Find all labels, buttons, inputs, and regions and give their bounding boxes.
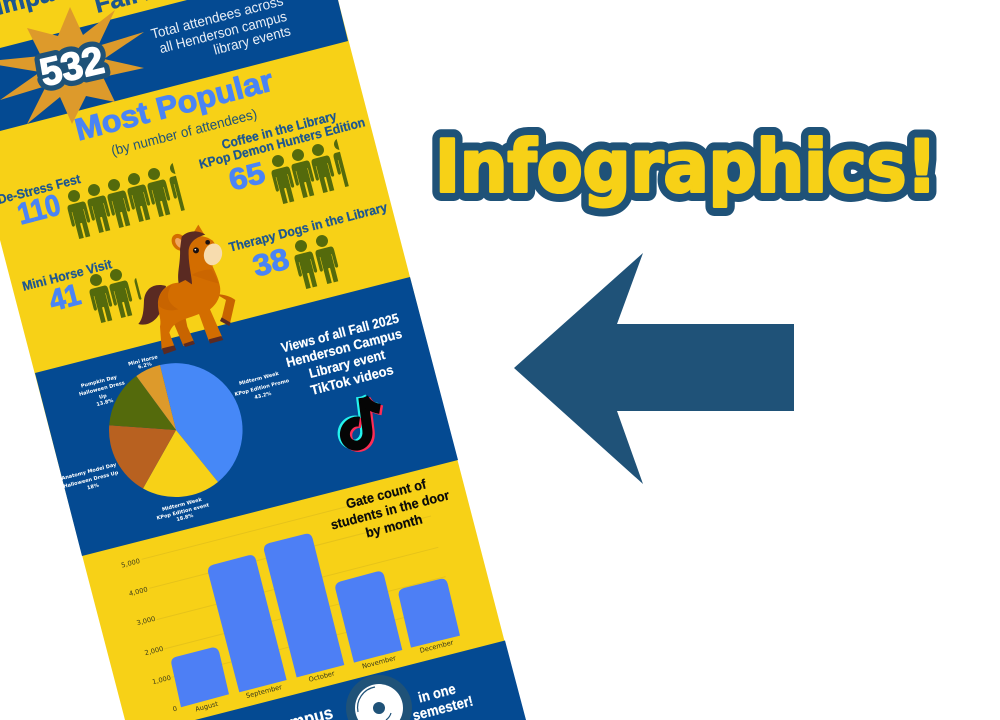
pie labels: 43.2% — [254, 391, 272, 401]
panel: middle blue band — [35, 277, 458, 556]
poster heading, cropped — [0, 0, 201, 21]
pie labels: Midterm Week — [161, 497, 203, 513]
stat: Coffee in the Library 65: KPop Demon Hunters Edition — [197, 114, 367, 172]
text: in one semester: in one — [417, 681, 457, 707]
text: TikTok views title: Library event — [307, 347, 387, 381]
bar chart: gate count by month: 3,000 — [136, 615, 156, 627]
text: gate count title: Gate count of — [344, 476, 428, 512]
stat: Therapy Dogs in the Library 38: 38 — [249, 243, 293, 283]
bar chart: gate count by month: December — [419, 638, 455, 655]
subheading: by number of attendees: (by number of attendees) — [109, 105, 259, 159]
pie labels: Halloween Dress Up — [63, 470, 119, 490]
pie labels: Mini Horse — [128, 354, 159, 368]
stat: De-Stress Fest 110: 110 — [14, 189, 64, 231]
pie labels — [61, 354, 290, 523]
pie labels: Up — [99, 393, 108, 401]
bar chart: gate count by month: 0 — [172, 705, 178, 713]
panel: rotated poster background — [0, 0, 525, 720]
text: total attendees description: all Henderson campus — [158, 8, 288, 56]
bar chart: gate count by month: October — [308, 669, 336, 684]
pie labels: KPop Edition Promo — [234, 378, 290, 398]
bar chart: gate count by month: November — [361, 654, 397, 671]
stat: Mini Horse Visit 41: Mini Horse Visit — [21, 256, 114, 294]
title: Infographics!: Infographics! — [435, 124, 937, 208]
pie chart: TikTok views — [109, 363, 243, 497]
pie labels: 13.8% — [96, 398, 114, 408]
stat: Coffee in the Library 65: 65 — [225, 157, 269, 197]
pie labels: KPop Edition event — [156, 502, 210, 522]
text: in one semester — [411, 681, 475, 720]
bar chart: gate count by month — [120, 487, 460, 713]
stat: Coffee in the Library 65 — [197, 108, 367, 205]
bar chart: gate count by month: August — [194, 700, 219, 713]
text: TikTok views title: Views of all Fall 2025 — [280, 310, 401, 355]
heading: Most Popular: Most Popular — [71, 63, 277, 147]
bar chart: gate count by month: 1,000 — [151, 674, 172, 686]
bar chart: gate count by month: 4,000 — [128, 585, 149, 598]
icon: TikTok logo — [343, 397, 382, 447]
pie labels: 6.2% — [138, 361, 152, 371]
text: gate count title: students in the door — [329, 487, 452, 533]
pie labels: Halloween Dress — [78, 380, 126, 398]
pie labels: 18.8% — [176, 513, 194, 523]
stat: De-Stress Fest 110 — [0, 163, 185, 239]
arrow: pointing left to the poster — [514, 253, 794, 484]
stat: Coffee in the Library 65: Coffee in the Library — [220, 108, 339, 152]
panel: bottom blue band — [195, 640, 526, 720]
pie labels: Pumpkin Day — [80, 374, 118, 390]
stat: 532 total attendees: 532 — [36, 39, 108, 95]
text: total attendees description: library events — [212, 22, 292, 58]
text: TikTok views title — [280, 310, 403, 398]
pie labels: 18% — [86, 483, 100, 491]
stat: Therapy Dogs in the Library 38: Therapy Dogs in the Library — [227, 199, 389, 255]
panel: top blue band — [0, 0, 348, 131]
text: TikTok views title: Henderson Campus — [285, 326, 403, 370]
stat: 532 total attendees: 532 — [36, 39, 108, 95]
title: Infographics!: Infographics! — [435, 124, 937, 208]
icon: disc in halo — [346, 675, 412, 720]
stat: Mini Horse Visit 41: 41 — [46, 278, 84, 318]
text: TikTok views title: TikTok videos — [309, 362, 395, 398]
icon: cartoon horse — [138, 225, 235, 354]
text: gate count title: by month — [364, 511, 424, 541]
pie labels: Anatomy Model Day — [61, 462, 118, 482]
stat: Therapy Dogs in the Library 38 — [227, 199, 389, 290]
icon: gold starburst — [0, 7, 144, 124]
bar chart: gate count by month: 5,000 — [120, 557, 141, 570]
bar chart: gate count by month: September — [245, 683, 283, 700]
stat: Mini Horse Visit 41 — [22, 260, 142, 323]
pie labels: Midterm Week — [238, 371, 280, 387]
bar chart: gate count by month: 2,000 — [144, 645, 164, 657]
